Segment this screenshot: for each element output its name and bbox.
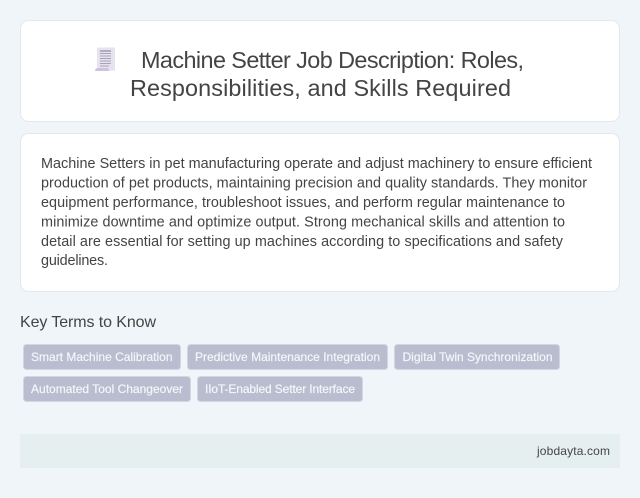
title bbox=[130, 47, 524, 101]
tag: automated tool changeover bbox=[24, 376, 190, 402]
tag: digital twin synchronization bbox=[394, 344, 560, 370]
tag: digital twin synchronization: Digital Twin Synchronization bbox=[402, 350, 552, 364]
title: Machine Setter Job Description: Roles, bbox=[141, 47, 524, 73]
description text: production of pet products, maintaining precision and quality standards. They monitor bbox=[41, 176, 587, 192]
tag: automated tool changeover: Automated Tool Changeover bbox=[31, 382, 183, 396]
description text: equipment performance, troubleshoot issues, and perform regular maintenance to bbox=[41, 195, 565, 211]
description text: guidelines. bbox=[41, 253, 108, 269]
footer text: jobdayta.com bbox=[536, 444, 610, 458]
description text: Machine Setters in pet manufacturing operate and adjust machinery to ensure efficient bbox=[41, 156, 592, 172]
description text: detail are essential for setting up machines according to specifications and safety bbox=[41, 234, 564, 250]
tag: iiot-enabled setter interface bbox=[198, 376, 362, 402]
panel: title card bbox=[20, 20, 620, 122]
tag: predictive maintenance integration: Predictive Maintenance Integration bbox=[195, 350, 380, 364]
heading: key terms: Key Terms to Know bbox=[20, 314, 156, 331]
tag: smart machine calibration bbox=[24, 344, 180, 370]
tag: iiot-enabled setter interface: IIoT-Enabled Setter Interface bbox=[205, 382, 355, 396]
footer bar bbox=[20, 434, 620, 468]
description text: minimize downtime and optimize output. Strong mechanical skills and attention to bbox=[41, 214, 565, 230]
description text bbox=[41, 156, 592, 269]
tag: predictive maintenance integration bbox=[188, 344, 388, 370]
tag list bbox=[24, 344, 560, 402]
title: Responsibilities, and Skills Required bbox=[130, 75, 511, 101]
icon: document scroll bbox=[95, 48, 115, 71]
panel: description card bbox=[20, 134, 620, 292]
tag: smart machine calibration: Smart Machine Calibration bbox=[31, 350, 172, 364]
